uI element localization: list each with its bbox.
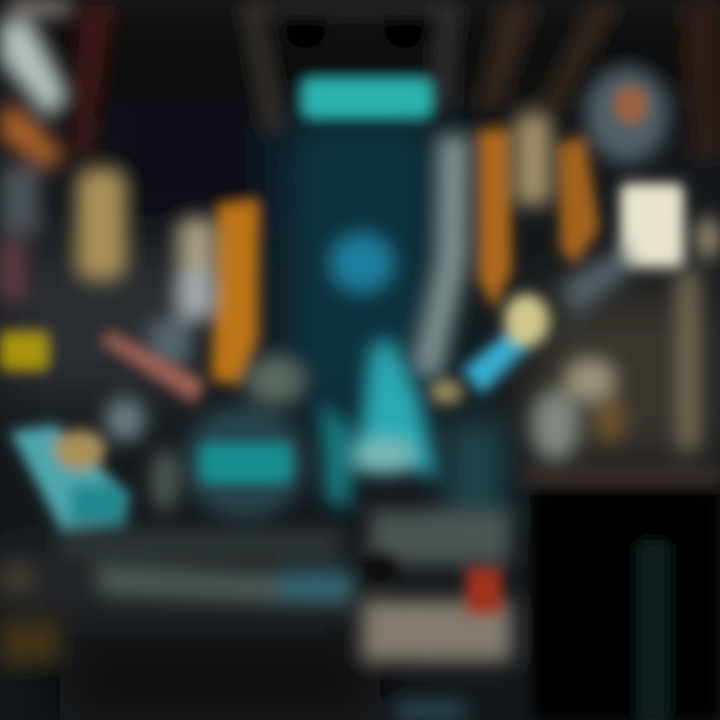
black cabinet [532,490,720,720]
dial centre [614,86,648,124]
cyan sign [302,78,432,118]
glowing tip [504,294,548,346]
bottom teal glow [395,702,465,720]
yellow joint [431,380,463,404]
yellow tag [0,332,48,370]
pale lamp left [76,168,126,280]
orange bar right [558,135,600,265]
teal beam [320,400,355,510]
white lamp left [150,218,216,365]
orange bar left [212,200,258,385]
round gauge [183,404,307,520]
laptop left [10,425,130,532]
cyan stick [462,325,530,395]
dark object [360,552,400,584]
papers [362,600,512,662]
orange bar centre [478,128,512,310]
pale lamp right [514,112,552,207]
red box [466,568,502,614]
bright lantern [620,183,684,267]
teal pill [200,443,292,483]
table edge [525,464,720,486]
desk strip [60,530,355,605]
pale cyan highlight [353,437,417,473]
lantern arm [560,245,632,315]
blue glow [330,233,394,293]
pale vertical tube [412,135,470,380]
cyan cluster [352,340,440,480]
ceiling beams [70,0,720,160]
small grey objects [0,355,305,665]
teal lower block [445,420,505,530]
round dial [585,67,669,163]
pink stripe [100,333,205,404]
teal column [300,130,420,390]
right machine [531,358,626,461]
right pillar [678,216,720,450]
paper stack upper [370,510,510,565]
top-left shelf objects [0,0,70,300]
